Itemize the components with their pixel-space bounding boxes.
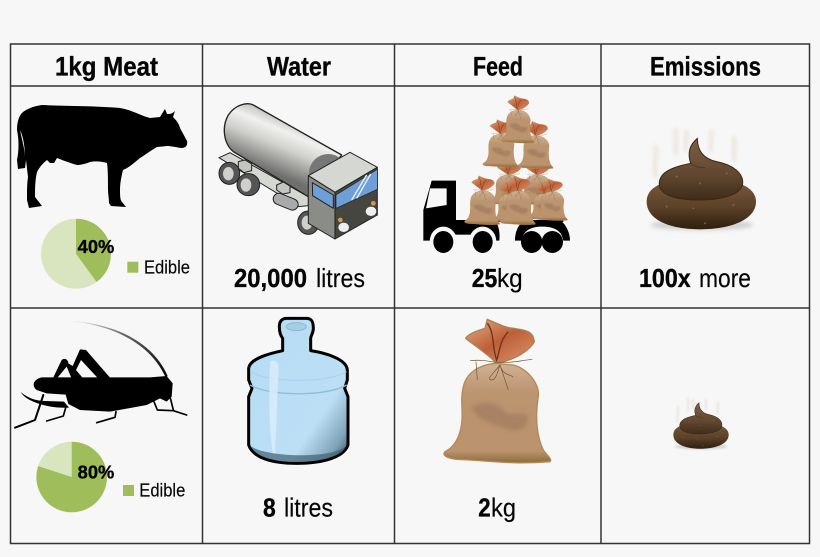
value: 20,000 litres: [234, 263, 365, 293]
legend: Edible (cricket): [123, 480, 185, 501]
value: 8 litres: [263, 493, 333, 523]
pie label: 80%: 80%: [78, 462, 114, 482]
icon: feed sack: [444, 319, 551, 463]
value: 100x more: more: [699, 263, 751, 293]
value: 2kg: kg: [491, 493, 516, 523]
value: 100x more: 100x: [639, 263, 691, 293]
icon: large steaming poop: [647, 128, 756, 230]
value: 20,000 litres: 20,000: [234, 263, 307, 293]
header row: [55, 52, 761, 82]
heading: Emissions: Emissions: [650, 52, 761, 82]
icon: tanker truck: [219, 104, 377, 239]
heading: Water: Water: [267, 52, 331, 82]
legend: Edible (cow): Edible: [144, 256, 190, 277]
sacks stack: [465, 96, 568, 225]
pie label: 40%: 40%: [78, 237, 114, 257]
legend: Edible (cow): [127, 256, 190, 277]
value: 100x more: [639, 263, 751, 293]
value: 25kg: kg: [497, 263, 523, 293]
legend: Edible (cricket): Edible: [139, 480, 185, 501]
pie chart: cricket 80% edible: [36, 442, 114, 512]
heading: 1kg Meat: 1kg Meat: [55, 52, 158, 82]
value: 8 litres: 8: [263, 493, 276, 523]
value: 20,000 litres: litres: [316, 263, 365, 293]
pie chart: cow 40% edible: [41, 219, 114, 289]
icon: truck with feed sacks: [423, 96, 570, 257]
value: 2kg: 2: [478, 493, 491, 523]
icon: small steaming poop: [673, 398, 729, 449]
value: 8 litres: litres: [284, 493, 333, 523]
value: 2kg: [478, 493, 516, 523]
icon: cricket silhouette: [15, 321, 187, 428]
heading: Feed: Feed: [473, 52, 523, 82]
icon: cow silhouette: [17, 105, 187, 208]
value: 25kg: 25: [472, 263, 497, 293]
icon: water bottle: [249, 318, 348, 463]
value: 25kg: [472, 263, 523, 293]
truck silhouette: [423, 181, 570, 257]
